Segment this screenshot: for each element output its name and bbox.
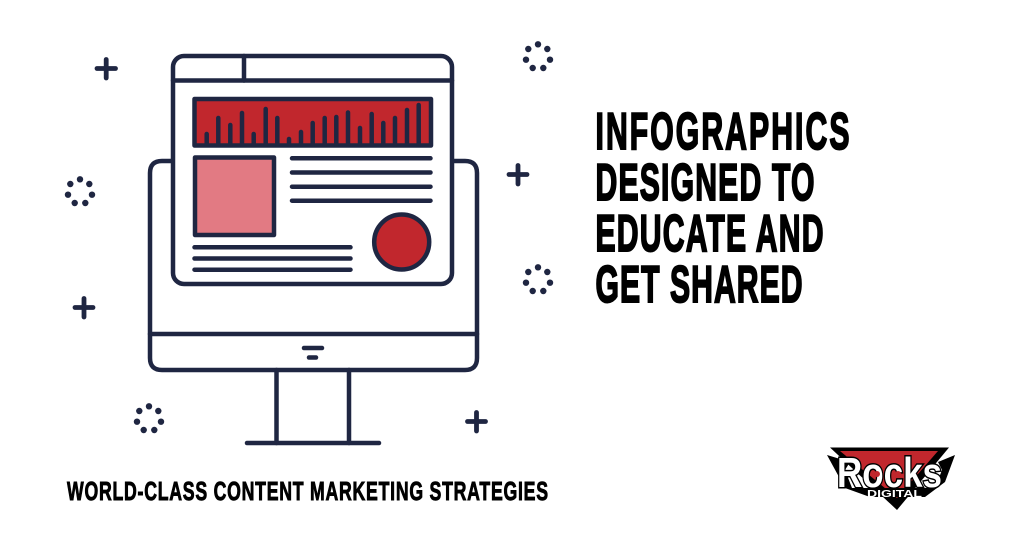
heading (596, 104, 849, 314)
red circle button (374, 214, 429, 270)
logo: Rocks Digital (827, 448, 955, 510)
browser window (173, 56, 452, 284)
tagline: WORLD-CLASS CONTENT MARKETING STRATEGIES (67, 477, 548, 506)
icon: plus right of monitor (509, 166, 527, 184)
icon: desktop monitor illustration (150, 56, 477, 443)
icon: plus lower left (75, 298, 93, 317)
icon: dotted ring right (523, 264, 553, 294)
heading: INFOGRAPHICS (596, 104, 849, 161)
text lines: upper right (292, 158, 430, 201)
logo: Rocks Digital: Rocks (837, 449, 942, 496)
monitor body (150, 161, 477, 370)
icon: plus top left (97, 60, 116, 78)
monitor stand (247, 370, 379, 443)
image placeholder (195, 158, 274, 235)
heading: EDUCATE AND (596, 206, 823, 263)
icon: dotted ring left (65, 176, 95, 206)
heading: GET SHARED (596, 257, 803, 314)
logo: Rocks Digital: DIGITAL (867, 489, 922, 500)
icon: plus bottom right of stand (468, 412, 486, 431)
icon: dotted ring bottom (134, 403, 164, 433)
bar chart banner (194, 99, 431, 146)
text lines: lower left (194, 247, 350, 270)
icon: dotted ring top right (523, 41, 553, 71)
heading: DESIGNED TO (596, 155, 815, 212)
